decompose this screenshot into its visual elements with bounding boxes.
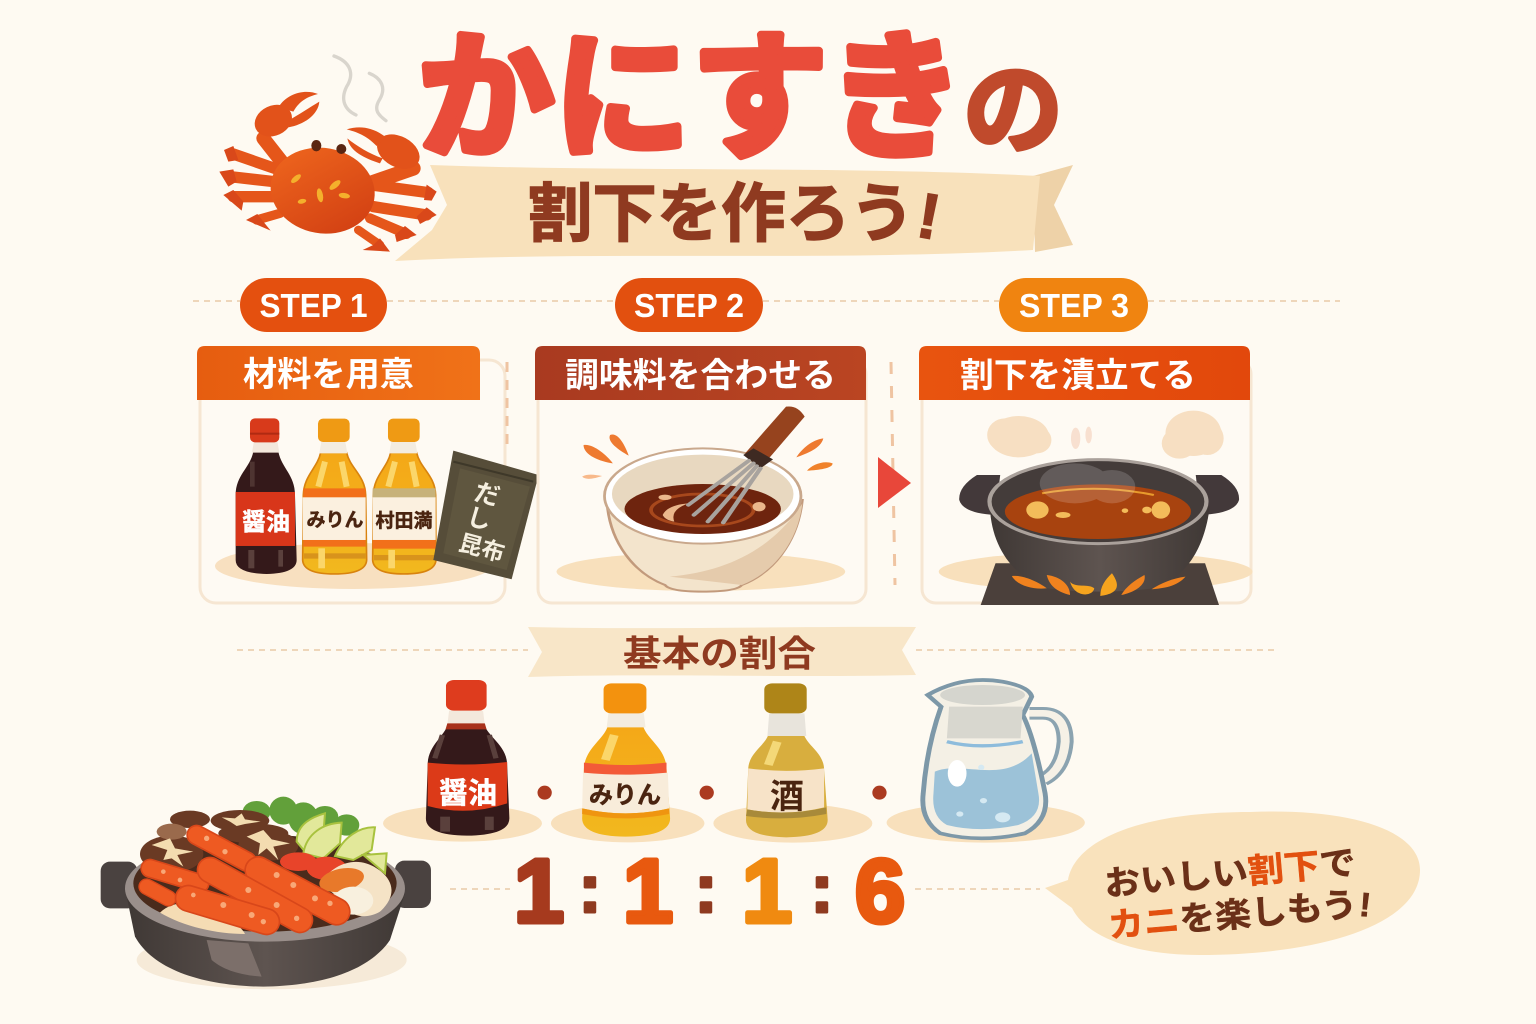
icon: crab with steam [219, 56, 437, 252]
leek slices [297, 813, 387, 873]
step 3 badge [999, 278, 1148, 332]
step 2 badge [615, 278, 763, 332]
rising steam [1040, 463, 1135, 503]
pot rim [989, 460, 1206, 544]
bubble line 1: おいしい割下で [1103, 844, 1357, 904]
ratio numbers 1:1:1:6: 1 [623, 842, 673, 942]
sauce [625, 484, 781, 534]
title: かにすき: かにすき [418, 22, 964, 176]
tomato [280, 852, 347, 880]
label: mirin: みりん [306, 509, 364, 531]
ratio dot 2 [700, 786, 714, 800]
step 2 badge: STEP 2 [634, 287, 744, 324]
step 3 badge: STEP 3 [1019, 287, 1129, 324]
mushroom stars [152, 813, 290, 867]
leg spots [161, 836, 333, 924]
step 3 header: 割下を漬立てる [960, 357, 1196, 395]
ratio dot 1 [538, 786, 552, 800]
icon: kanisuki hot pot [101, 797, 431, 989]
steam wisps [334, 56, 386, 121]
greens [243, 797, 359, 836]
pot body [126, 893, 405, 987]
subtitle text: 割下を作ろう! [528, 178, 946, 254]
bottle: cooking sake [373, 419, 436, 574]
bubble line 2: カニを楽しもう! [1106, 884, 1376, 948]
panel: step 2 mixing [535, 346, 866, 603]
ratio dot 3 [872, 786, 887, 800]
title: particle の: の [963, 55, 1063, 167]
sachet: dashi kombu [433, 451, 539, 579]
crab leg tips [219, 146, 437, 252]
panel: step 3 simmering [919, 346, 1253, 605]
pot rim and inside [125, 835, 405, 942]
steam clouds [987, 411, 1224, 459]
mushrooms [140, 810, 298, 872]
crab legs [230, 138, 428, 245]
ratio numbers 1:1:1:6: : [579, 851, 601, 927]
step 1 badge [240, 278, 387, 332]
banner: subtitle ribbon [395, 165, 1073, 261]
flames [1012, 573, 1185, 596]
ratio numbers 1:1:1:6: 1 [514, 842, 564, 942]
label: sake: 村田満 [375, 510, 433, 532]
title: main heading [418, 22, 1063, 176]
ratio numbers 1:1:1:6: : [695, 851, 717, 927]
crab legs [147, 835, 337, 922]
bottle: mirin [303, 419, 367, 574]
label: soy: 醤油 [242, 509, 290, 536]
bowl body [607, 500, 802, 592]
crab eyes [311, 140, 346, 154]
ratio label: mirin: みりん [589, 782, 661, 809]
label: dashi: だ [471, 478, 503, 512]
shell spots [290, 173, 350, 205]
ratio heading: 基本の割合 [623, 633, 816, 674]
step 2 header [535, 346, 866, 400]
crab claws [249, 92, 426, 176]
stove [981, 563, 1219, 605]
step 1 header [197, 346, 480, 400]
splash marks [582, 435, 833, 479]
broth [1005, 484, 1191, 539]
banner: basic ratio [528, 627, 916, 677]
bottle: soy sauce [236, 418, 297, 574]
icon: bowl and whisk [557, 406, 845, 592]
label: dashi: 昆布 [456, 529, 508, 567]
step 3 header [919, 346, 1250, 400]
ratio numbers 1:1:1:6: 6 [855, 842, 905, 942]
step 2 header: 調味料を合わせる [565, 357, 836, 395]
label: dashi: し [464, 503, 494, 536]
ratio numbers 1:1:1:6 [514, 842, 905, 942]
label: dashi [456, 478, 508, 567]
ratio illustrations [383, 680, 1085, 843]
panel: step 1 ingredients [197, 346, 539, 603]
pot shadow [137, 931, 407, 989]
bottle shadows [383, 803, 1085, 843]
water jug [923, 680, 1065, 838]
ratio bottle: sake [746, 683, 828, 837]
bowl rim [604, 448, 801, 544]
pot handles [101, 861, 431, 908]
whisk [745, 406, 805, 457]
shadow under bottles [215, 543, 491, 589]
step 1 header: 材料を用意 [243, 356, 414, 394]
tofu and seafood [320, 862, 391, 916]
ratio label: soy: 醤油 [439, 777, 497, 810]
ratio bottle: soy [426, 680, 509, 836]
ratio label: sake: 酒 [770, 778, 804, 816]
icon: pot on stove [939, 411, 1253, 605]
pot handles [959, 475, 1239, 515]
crab shell [264, 140, 382, 242]
arrow: step 2 to step 3 [878, 457, 911, 508]
speech bubble [1045, 812, 1420, 955]
ratio numbers 1:1:1:6: 1 [742, 842, 792, 942]
ratio bottle: mirin [582, 683, 670, 837]
step 1 badge: STEP 1 [260, 287, 368, 324]
ratio numbers 1:1:1:6: : [811, 851, 833, 927]
pot body [990, 507, 1210, 592]
